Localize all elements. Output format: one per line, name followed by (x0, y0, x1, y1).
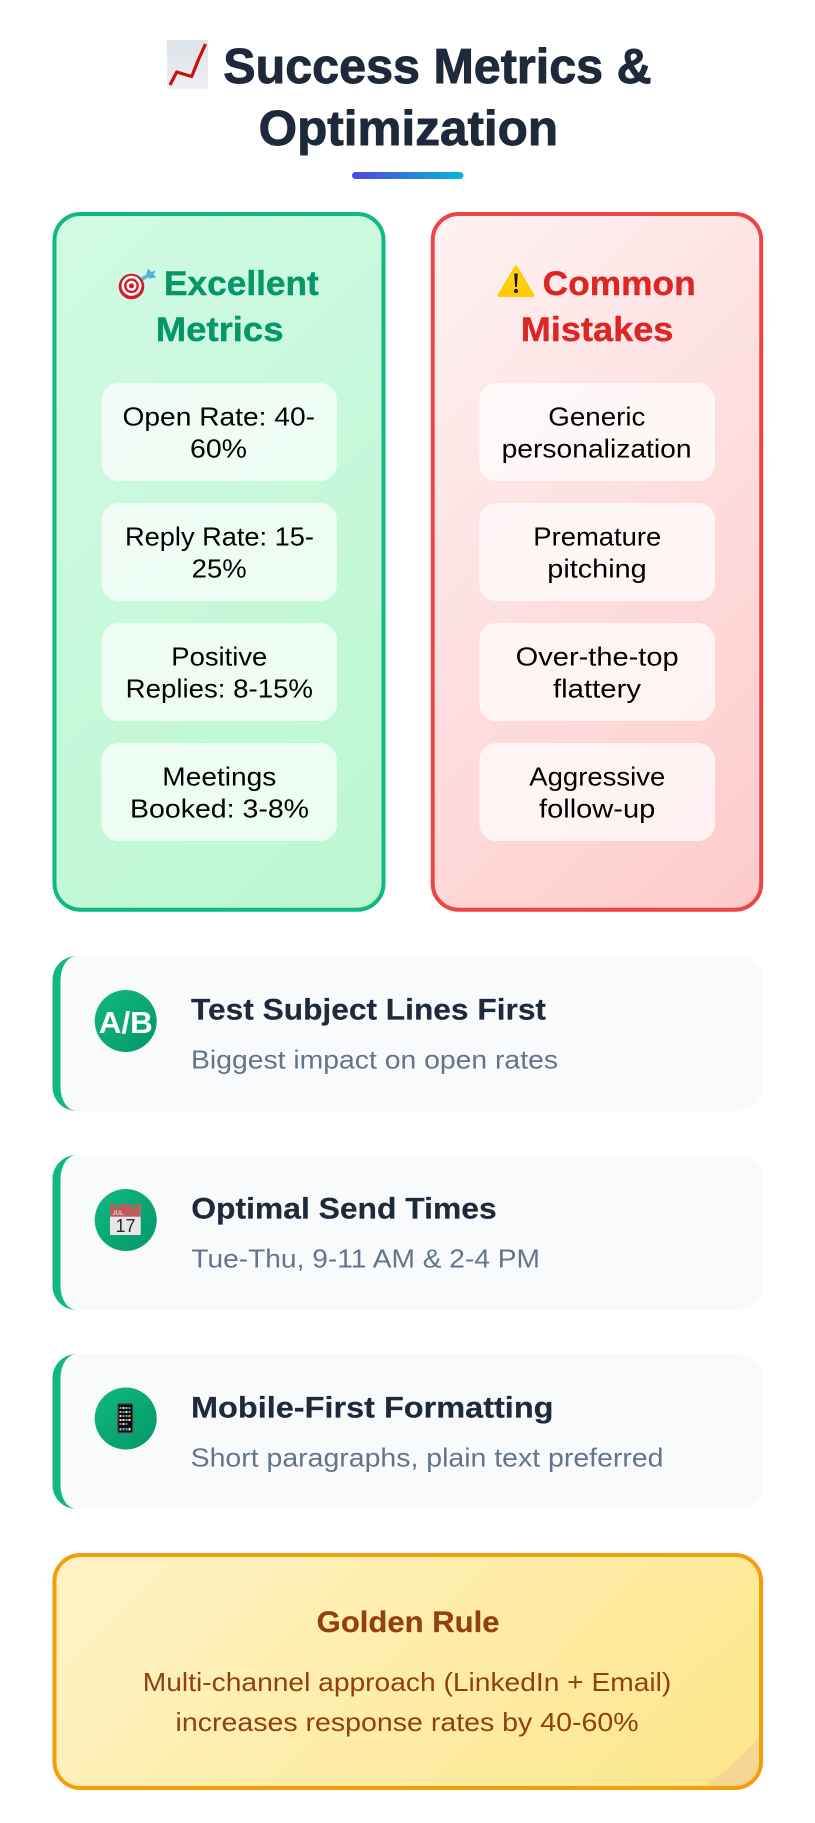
tip heading: Test Subject Lines First (191, 993, 546, 1026)
metric: open rate: 60% (190, 434, 247, 464)
metric: open rate: Open Rate: 40- (122, 402, 315, 432)
tip description: Tue-Thu, 9-11 AM & 2-4 PM (191, 1243, 540, 1273)
metric: reply rate: 25% (192, 554, 247, 584)
mistake: premature pitching: Premature (533, 522, 661, 552)
callout text: Multi-channel approach (LinkedIn + Email) (143, 1667, 671, 1697)
panel heading: Common (543, 265, 696, 303)
title text line one: Success Metrics & (223, 39, 652, 94)
metric: reply rate: Reply Rate: 15- (125, 522, 314, 552)
mistake: generic personalization (479, 383, 715, 481)
metric: positive replies: Replies: 8-15% (126, 674, 313, 704)
icon: calendar (95, 1189, 157, 1251)
icon: warning sign (499, 267, 533, 296)
panel heading: Excellent (164, 265, 319, 303)
mistake: over-the-top flattery (479, 623, 715, 721)
icon: A/B badge: A/B (99, 1005, 153, 1040)
panel: excellent metrics (54, 214, 384, 910)
mistake: aggressive follow-up: Aggressive (529, 762, 665, 792)
tip description: Biggest impact on open rates (191, 1044, 558, 1074)
callout: golden rule (54, 1555, 761, 1788)
title underline (352, 172, 464, 179)
mistake: over-the-top flattery: flattery (553, 674, 641, 704)
mistake: aggressive follow-up: follow-up (539, 794, 655, 824)
metric: open rate (102, 383, 337, 481)
icon: calendar: 17 (115, 1216, 136, 1236)
callout text: increases response rates by 40-60% (176, 1707, 639, 1737)
mistake: generic personalization: personalization (502, 434, 692, 464)
mistake: aggressive follow-up (479, 743, 715, 841)
tip heading: Mobile-First Formatting (191, 1391, 554, 1424)
panel: mobile-first formatting tip (52, 1354, 763, 1509)
folded corner (703, 1736, 761, 1787)
panel heading (521, 265, 696, 349)
icon: A/B badge (95, 990, 157, 1052)
mistake: premature pitching (479, 503, 715, 601)
panel: optimal send times tip (52, 1155, 763, 1310)
tip heading: Optimal Send Times (191, 1192, 497, 1225)
metric: positive replies (102, 623, 337, 721)
panel heading: Mistakes (521, 311, 673, 349)
metric: meetings booked: Meetings (162, 762, 276, 792)
title (167, 39, 652, 156)
callout text (143, 1667, 671, 1737)
icon: mobile phone (95, 1388, 157, 1450)
mistake: premature pitching: pitching (547, 554, 647, 584)
mistake: generic personalization: Generic (548, 402, 645, 432)
callout heading: Golden Rule (317, 1606, 500, 1639)
panel: common mistakes (433, 214, 761, 910)
metric: meetings booked (102, 743, 337, 841)
icon: bullseye with dart (119, 268, 156, 299)
icon: calendar: JUL (112, 1211, 124, 1217)
metric: meetings booked: Booked: 3-8% (130, 794, 309, 824)
panel heading (156, 265, 319, 349)
title text line two: Optimization (259, 101, 558, 156)
tip description: Short paragraphs, plain text preferred (191, 1442, 664, 1472)
panel: test subject lines tip (52, 956, 763, 1111)
panel heading: Metrics (156, 311, 284, 349)
icon: chart with upward trend (167, 40, 208, 89)
metric: reply rate (102, 503, 337, 601)
mistake: over-the-top flattery: Over-the-top (516, 642, 679, 672)
metric: positive replies: Positive (171, 642, 267, 672)
